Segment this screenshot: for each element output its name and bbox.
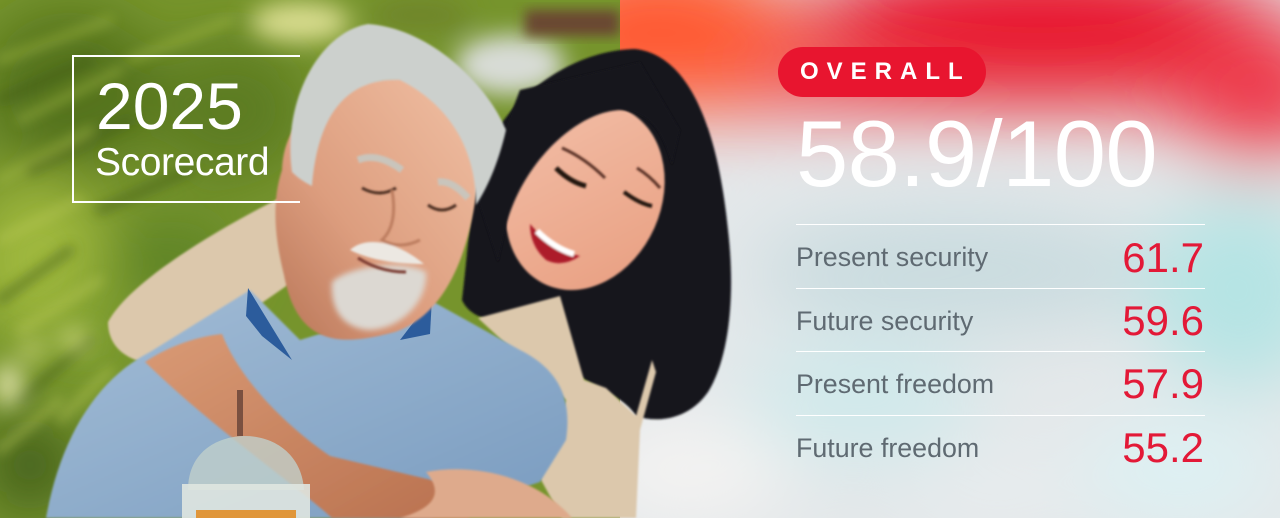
value: present security: 61.7 xyxy=(1122,234,1204,281)
year: 2025 xyxy=(96,69,243,143)
row: future freedom: Future freedom xyxy=(796,433,979,463)
man's face xyxy=(275,77,479,340)
woman's blouse xyxy=(478,296,656,518)
woman's hair xyxy=(462,49,731,419)
panel: foliage background xyxy=(0,0,620,518)
man's beard xyxy=(332,265,426,330)
overall score: 58.9/100 xyxy=(796,101,1157,206)
panel: score background gradient xyxy=(620,0,1280,518)
man's hand xyxy=(400,469,572,518)
row: future security: Future security xyxy=(796,306,973,336)
woman's fringe xyxy=(478,62,680,262)
value: present freedom: 57.9 xyxy=(1122,360,1204,407)
overall badge xyxy=(778,47,986,97)
man's collar xyxy=(246,288,432,360)
overall badge: OVERALL xyxy=(800,58,971,85)
woman's face xyxy=(477,62,693,316)
woman's arm around man xyxy=(145,334,470,518)
man's white hair xyxy=(290,24,506,205)
row: present security: Present security xyxy=(796,242,988,272)
woman's eyes, lips xyxy=(530,148,660,263)
title box: 2025 Scorecard xyxy=(72,55,300,203)
woman's sleeve xyxy=(108,196,292,362)
cup xyxy=(182,390,310,518)
value: future security: 59.6 xyxy=(1122,297,1204,344)
man's shirt xyxy=(46,290,567,518)
value: future freedom: 55.2 xyxy=(1122,424,1204,471)
man's moustache and features xyxy=(350,158,468,272)
scorecard label: Scorecard xyxy=(95,141,269,184)
row: present freedom: Present freedom xyxy=(796,369,994,399)
